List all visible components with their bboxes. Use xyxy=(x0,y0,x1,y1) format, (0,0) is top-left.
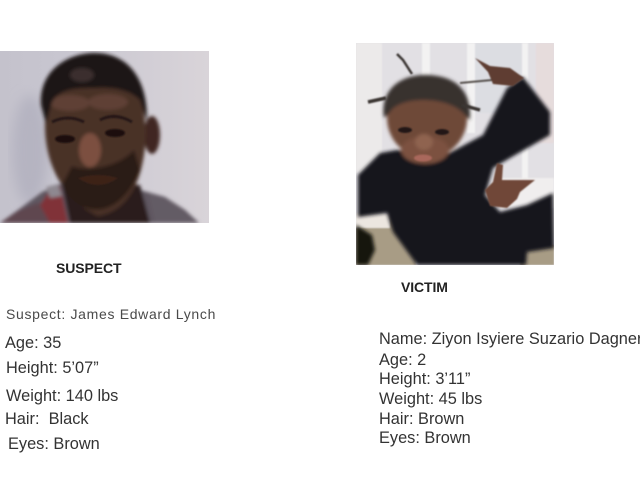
text: suspect hair: Hair: Black xyxy=(5,410,89,428)
text: victim name: Name: Ziyon Isyiere Suzario Dagner xyxy=(379,330,640,348)
text: suspect height: Height: 5’07” xyxy=(6,359,99,377)
text: suspect weight: Weight: 140 lbs xyxy=(6,387,118,405)
heading: victim: VICTIM xyxy=(401,279,448,295)
heading: suspect: SUSPECT xyxy=(56,260,121,276)
text: victim hair: Hair: Brown xyxy=(379,410,464,428)
text: suspect age: Age: 35 xyxy=(5,334,61,352)
text: victim height: Height: 3’11” xyxy=(379,370,470,388)
panel: suspect photo xyxy=(0,43,554,265)
text: suspect eyes: Eyes: Brown xyxy=(8,435,100,453)
panel: victim photo xyxy=(356,43,554,265)
text: victim eyes: Eyes: Brown xyxy=(379,429,471,447)
text: victim age: Age: 2 xyxy=(379,351,426,369)
text: suspect name: Suspect: James Edward Lynch xyxy=(6,306,216,322)
text: victim weight: Weight: 45 lbs xyxy=(379,390,482,408)
